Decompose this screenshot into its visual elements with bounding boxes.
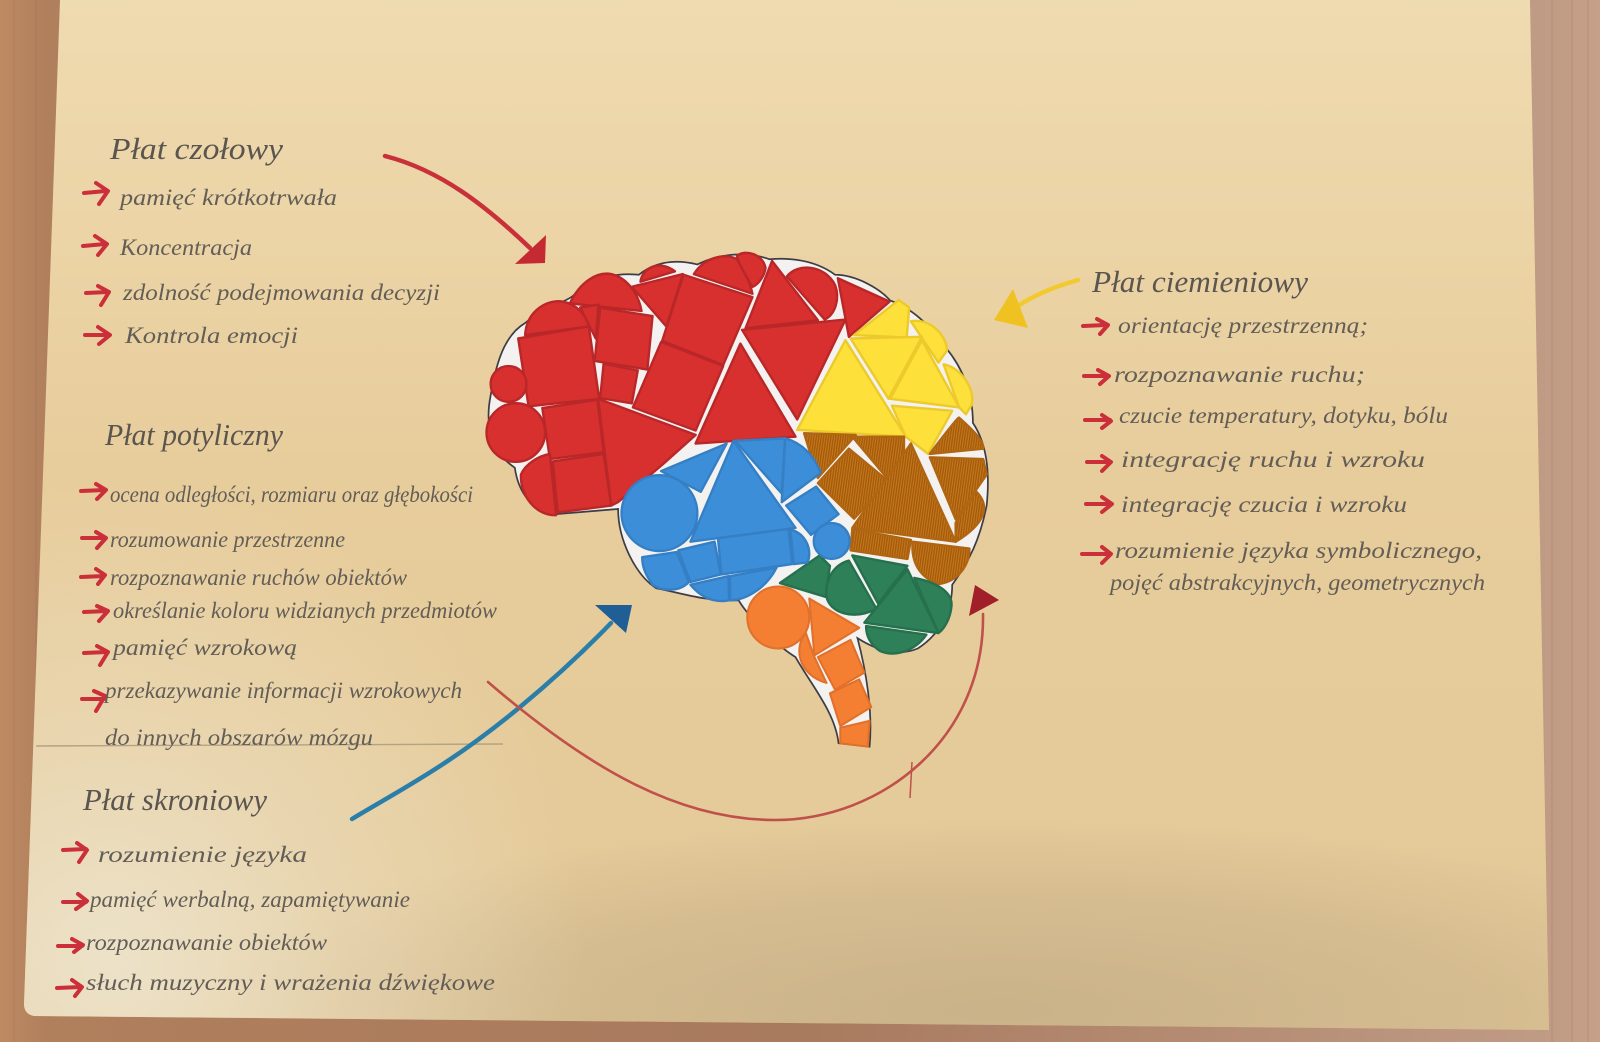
item: short-term memory: [84, 183, 337, 210]
item: passing visual information: przekazywanie informacji wzrokowych: [103, 678, 462, 703]
brain stem: orange foam shapes: [747, 586, 871, 747]
item: visual memory: pamięć wzrokową: [111, 635, 297, 660]
cerebellum: green foam shapes: [780, 555, 952, 653]
item: spatial reasoning: rozumowanie przestrzenne: [110, 527, 345, 552]
item: decision making: zdolność podejmowania decyzji: [122, 280, 440, 305]
panel: frontal lobe notes: [83, 131, 440, 348]
item: understanding language: rozumienie języka: [98, 842, 307, 867]
item: temperature, touch, pain: czucie temperatury, dotyku, bólu: [1119, 403, 1448, 428]
item: object motion: rozpoznawanie ruchów obiektów: [110, 565, 408, 590]
brain outline: [489, 254, 988, 747]
item: emotion control: Kontrola emocji: [124, 323, 298, 348]
arrow: frontal lobe: [385, 156, 546, 264]
heading: frontal lobe: Płat czołowy: [109, 131, 283, 166]
item: motion and vision integration: [1087, 447, 1425, 472]
item: distance, size, depth: ocena odległości, rozmiaru oraz głębokości: [110, 482, 473, 507]
item: short-term memory: pamięć krótkotrwała: [118, 185, 337, 210]
item: visual memory: [84, 635, 297, 665]
item: motion and vision integration: integrację ruchu i wzroku: [1121, 447, 1425, 472]
item: concentration: Koncentracja: [119, 235, 252, 260]
panel: parietal lobe notes: [1082, 264, 1485, 595]
item continuation: do innych obszarów mózgu: [105, 725, 373, 750]
arrow: temporal lobe: [352, 605, 632, 819]
item: motion recognition: rozpoznawanie ruchu;: [1114, 362, 1365, 387]
occipital lobe: brown coloured shapes: [804, 418, 987, 584]
heading: temporal lobe: Płat skroniowy: [82, 782, 267, 817]
arrow: parietal lobe: [994, 280, 1078, 328]
item: colour: określanie koloru widzianych przedmiotów: [113, 598, 498, 623]
item: spatial orientation: orientację przestrzenną;: [1118, 313, 1368, 338]
item: understanding language: [63, 842, 307, 867]
panel: occipital lobe notes: [81, 417, 498, 750]
item: verbal memory: pamięć werbalną, zapamiętywanie: [88, 887, 410, 912]
item: touch and vision integration: integrację czucia i wzroku: [1121, 492, 1407, 517]
item: musical hearing: słuch muzyczny i wrażenia dźwiękowe: [86, 970, 495, 995]
item: symbolic language: rozumienie języka symbolicznego,: [1115, 538, 1482, 563]
arrow: occipital lobe: [488, 585, 999, 820]
faint pencil line: [36, 744, 503, 746]
brain diagram: [487, 253, 988, 747]
panel: temporal lobe notes: [57, 782, 495, 996]
heading: occipital lobe: Płat potyliczny: [104, 417, 283, 452]
heading: parietal lobe: Płat ciemieniowy: [1091, 264, 1308, 299]
item continuation: pojęć abstrakcyjnych, geometrycznych: [1108, 570, 1485, 595]
item: object recognition: rozpoznawanie obiektów: [86, 930, 328, 955]
parietal lobe: yellow foam shapes: [797, 300, 972, 454]
frontal lobe: red foam shapes: [487, 253, 890, 515]
temporal lobe: blue foam shapes: [622, 438, 850, 601]
